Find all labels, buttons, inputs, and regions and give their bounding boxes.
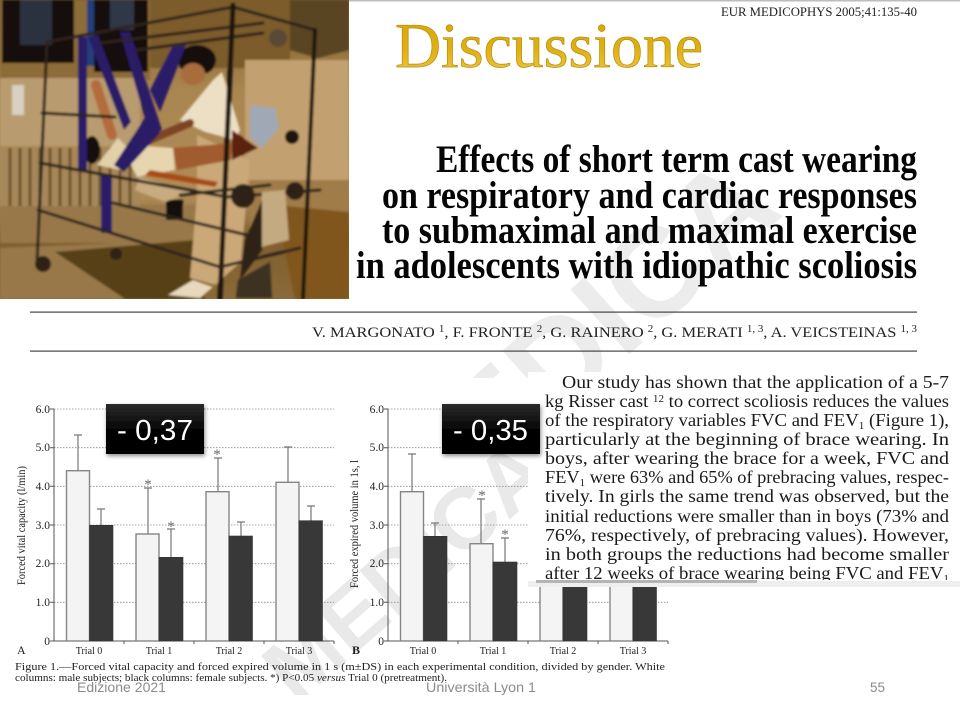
callout: -0,37: - 0,37	[117, 415, 193, 447]
bar chart A: forced vital capacity: 3.0	[36, 520, 50, 532]
photo wall areas	[0, 0, 349, 299]
article title	[356, 138, 917, 287]
bar chart A: forced vital capacity: 1.0	[36, 597, 50, 609]
photo man	[145, 45, 250, 298]
bar chart B: forced expired volume	[349, 404, 668, 657]
bar chart B: forced expired volume: *	[501, 527, 509, 543]
heading: Discussione: Discussione	[395, 10, 703, 81]
paragraph: study discussion: FEV	[545, 467, 580, 487]
authors: 1	[439, 324, 444, 335]
paragraph: study discussion: 1	[859, 420, 864, 432]
authors: 2	[537, 324, 542, 335]
bar chart B: forced expired volume: Trial 2	[550, 646, 576, 657]
paragraph: study discussion: kg Risser cast	[545, 391, 647, 411]
authors: , A. VEICSTEINAS	[763, 325, 901, 341]
bar chart A: forced vital capacity: A	[17, 643, 26, 657]
paragraph: study discussion: to correct scoliosis reduces the values	[664, 391, 949, 411]
bar chart B: forced expired volume: *	[478, 488, 486, 504]
bar chart A: forced vital capacity: Trial 1	[146, 646, 172, 657]
bar chart A: forced vital capacity: Trial 2	[216, 646, 242, 657]
bar chart A: forced vital capacity: 5.0	[36, 442, 50, 454]
callout: -0,35: - 0,35	[453, 415, 528, 447]
paragraph: study discussion: of the respiratory variables FVC and FEV	[545, 410, 853, 430]
footer: page number: 55	[870, 679, 885, 695]
figure caption	[15, 661, 665, 684]
bar chart A: forced vital capacity: 6.0	[36, 404, 50, 416]
bar chart A: forced vital capacity: Trial 3	[286, 646, 312, 657]
authors: , F. FRONTE	[444, 325, 537, 341]
callout: -0,37	[106, 404, 204, 454]
journal reference: EUR MEDICOPHYS 2005;41:135-40	[721, 5, 917, 19]
authors: , G. RAINERO	[542, 325, 648, 341]
bar chart A: forced vital capacity: Trial 0	[76, 646, 102, 657]
paragraph: study discussion: boys, after wearing the brace for a week, FVC and	[545, 448, 949, 468]
bar chart B: forced expired volume: 0	[378, 636, 384, 648]
bar chart B: forced expired volume: B	[352, 643, 360, 657]
bar chart A: forced vital capacity: 0	[44, 636, 50, 648]
paragraph panel backing	[528, 372, 960, 587]
authors: 2	[648, 324, 653, 335]
photo frame rails	[37, 5, 320, 298]
bar chart B: forced expired volume: Trial 0	[410, 646, 436, 657]
paragraph: study discussion: after 12 weeks of brace wearing being FVC and FEV	[545, 563, 937, 583]
bar chart B: forced expired volume: 5.0	[370, 442, 384, 454]
authors: V. MARGONATO	[312, 325, 424, 341]
bar chart B: forced expired volume: Forced expired volume in 1s, l	[349, 460, 361, 588]
photo: patient in casting frame	[0, 0, 349, 299]
authors: 1, 3	[747, 324, 763, 335]
bar chart A: forced vital capacity: *	[213, 447, 221, 463]
bar chart B: forced expired volume: Trial 1	[480, 646, 506, 657]
paragraph: study discussion: were 63% and 65% of prebracing values, respec-	[585, 467, 949, 487]
bar chart A: forced vital capacity: 2.0	[36, 558, 50, 570]
bar chart B: forced expired volume: 6.0	[370, 404, 384, 416]
paragraph: study discussion: 1	[580, 477, 585, 489]
bar chart A: forced vital capacity: 4.0	[36, 481, 50, 493]
watermark: lower: MEDICA	[245, 421, 567, 719]
paragraph: study discussion: in both groups the reductions had become smaller	[545, 544, 949, 564]
figure caption: Figure 1.—Forced vital capacity and forced expired volume in 1 s (m±DS) in each experimental condition, divided by gender. White	[15, 661, 665, 673]
bar chart B: forced expired volume: 2.0	[370, 558, 384, 570]
top edge line	[349, 0, 960, 2]
photo purple straps	[78, 32, 186, 233]
photo patient	[84, 85, 279, 202]
bar chart B: forced expired volume: 1.0	[370, 597, 384, 609]
paragraph: study discussion	[545, 372, 949, 585]
authors: 1, 3	[901, 324, 917, 335]
watermark: upper: MEDICA	[336, 128, 803, 569]
bar chart A: forced vital capacity	[16, 404, 334, 657]
paragraph: study discussion: initial reductions were smaller than in boys (73% and	[545, 506, 949, 527]
bar chart B: forced expired volume: 3.0	[370, 520, 384, 532]
authors: , G. MERATI	[653, 325, 747, 341]
paragraph: study discussion: 12	[653, 393, 664, 405]
bar chart B: forced expired volume: Trial 3	[620, 646, 646, 657]
footer: edition: Edizione 2021	[77, 679, 166, 695]
bar chart A: forced vital capacity: Forced vital capacity (l/min)	[16, 466, 28, 585]
paragraph: study discussion: 76%, respectively, of prebracing values). However,	[545, 525, 949, 546]
paragraph: study discussion: Our study has shown that the application of a 5-7	[562, 372, 949, 392]
photo towel	[236, 190, 289, 298]
figure caption: columns: male subjects; black columns: female subjects. *) P<0.05 versus Trial 0 (pretreatment).	[15, 672, 447, 684]
photo wheels and clamps	[35, 29, 304, 272]
footer: university: Università Lyon 1	[426, 679, 536, 695]
bar chart A: forced vital capacity: *	[144, 477, 152, 493]
callout: -0,35	[442, 404, 540, 454]
paragraph: study discussion: (Figure 1),	[864, 410, 949, 431]
paragraph: study discussion: tively. In girls the same trend was observed, but the	[545, 486, 949, 506]
bar chart B: forced expired volume: 4.0	[370, 481, 384, 493]
bar chart A: forced vital capacity: *	[167, 519, 175, 535]
paragraph: study discussion: particularly at the beginning of brace wearing. In	[545, 429, 949, 449]
photo windows	[2, 0, 148, 72]
paragraph: study discussion: 1	[943, 573, 949, 585]
photo radiator	[0, 148, 140, 206]
